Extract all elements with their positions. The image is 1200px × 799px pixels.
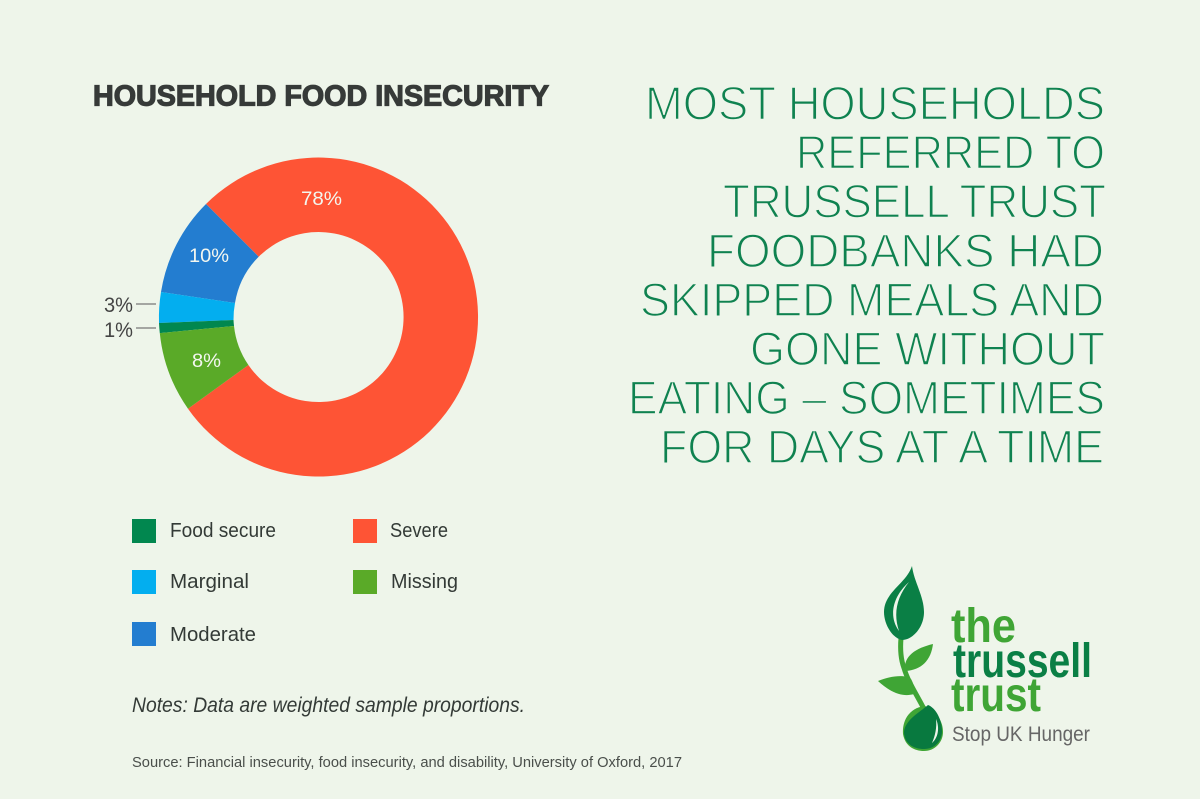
logo word: trussell: trussell (953, 635, 1092, 688)
headline: MOST HOUSEHOLDS (645, 76, 1105, 130)
icon: seedling stem (901, 638, 924, 709)
notes: Notes: Data are weighted sample proportions. (132, 694, 525, 717)
logo tagline: Stop UK Hunger (952, 723, 1090, 746)
legend item: marginal (132, 570, 249, 594)
label: 3% with leader (104, 294, 156, 317)
legend item: severe (353, 519, 448, 543)
legend item: marginal: Marginal (170, 571, 249, 593)
legend item: moderate (132, 622, 256, 646)
headline: FOR DAYS AT A TIME (660, 420, 1104, 473)
icon: seed (903, 705, 943, 751)
segment: missing 8% (160, 326, 248, 409)
logo: the trussell trust (878, 566, 1092, 751)
legend item: moderate: Moderate (170, 624, 256, 646)
headline: SKIPPED MEALS AND (640, 273, 1104, 326)
segment: severe 78% (188, 158, 478, 477)
headline: TRUSSELL TRUST (723, 174, 1106, 228)
segment: marginal 3% (159, 292, 235, 323)
legend item: missing: Missing (391, 571, 458, 593)
headline: EATING – SOMETIMES (628, 371, 1105, 424)
headline: REFERRED TO (796, 126, 1105, 178)
icon: left leaf (878, 676, 914, 695)
legend item: food secure: Food secure (170, 520, 276, 542)
legend (132, 519, 458, 646)
donut chart (104, 158, 478, 477)
label: 10%: 10% (189, 246, 229, 267)
icon: top leaf (884, 566, 924, 640)
label: 78%: 78% (301, 189, 342, 210)
source: Source: Financial insecurity, food insecurity, and disability, University of Oxford, 2017 (132, 755, 682, 771)
label: 1% with leader (104, 319, 156, 342)
legend item: food secure (132, 519, 276, 543)
chart title: HOUSEHOLD FOOD INSECURITY (93, 80, 549, 112)
label: 1% with leader: 1% (104, 319, 133, 342)
logo word: trust: trust (951, 669, 1041, 722)
headline: GONE WITHOUT (750, 322, 1105, 375)
headline (628, 76, 1106, 473)
icon: leaf highlight (893, 582, 909, 631)
segment: food secure 1% (159, 320, 234, 333)
legend item: missing (353, 570, 458, 594)
logo word: the: the (951, 600, 1016, 653)
headline: FOODBANKS HAD (707, 224, 1104, 277)
label: 8%: 8% (192, 351, 221, 372)
icon: right leaf (905, 644, 933, 671)
segment: moderate 10% (161, 204, 259, 303)
legend item: severe: Severe (390, 520, 448, 542)
label: 3% with leader: 3% (104, 294, 133, 317)
